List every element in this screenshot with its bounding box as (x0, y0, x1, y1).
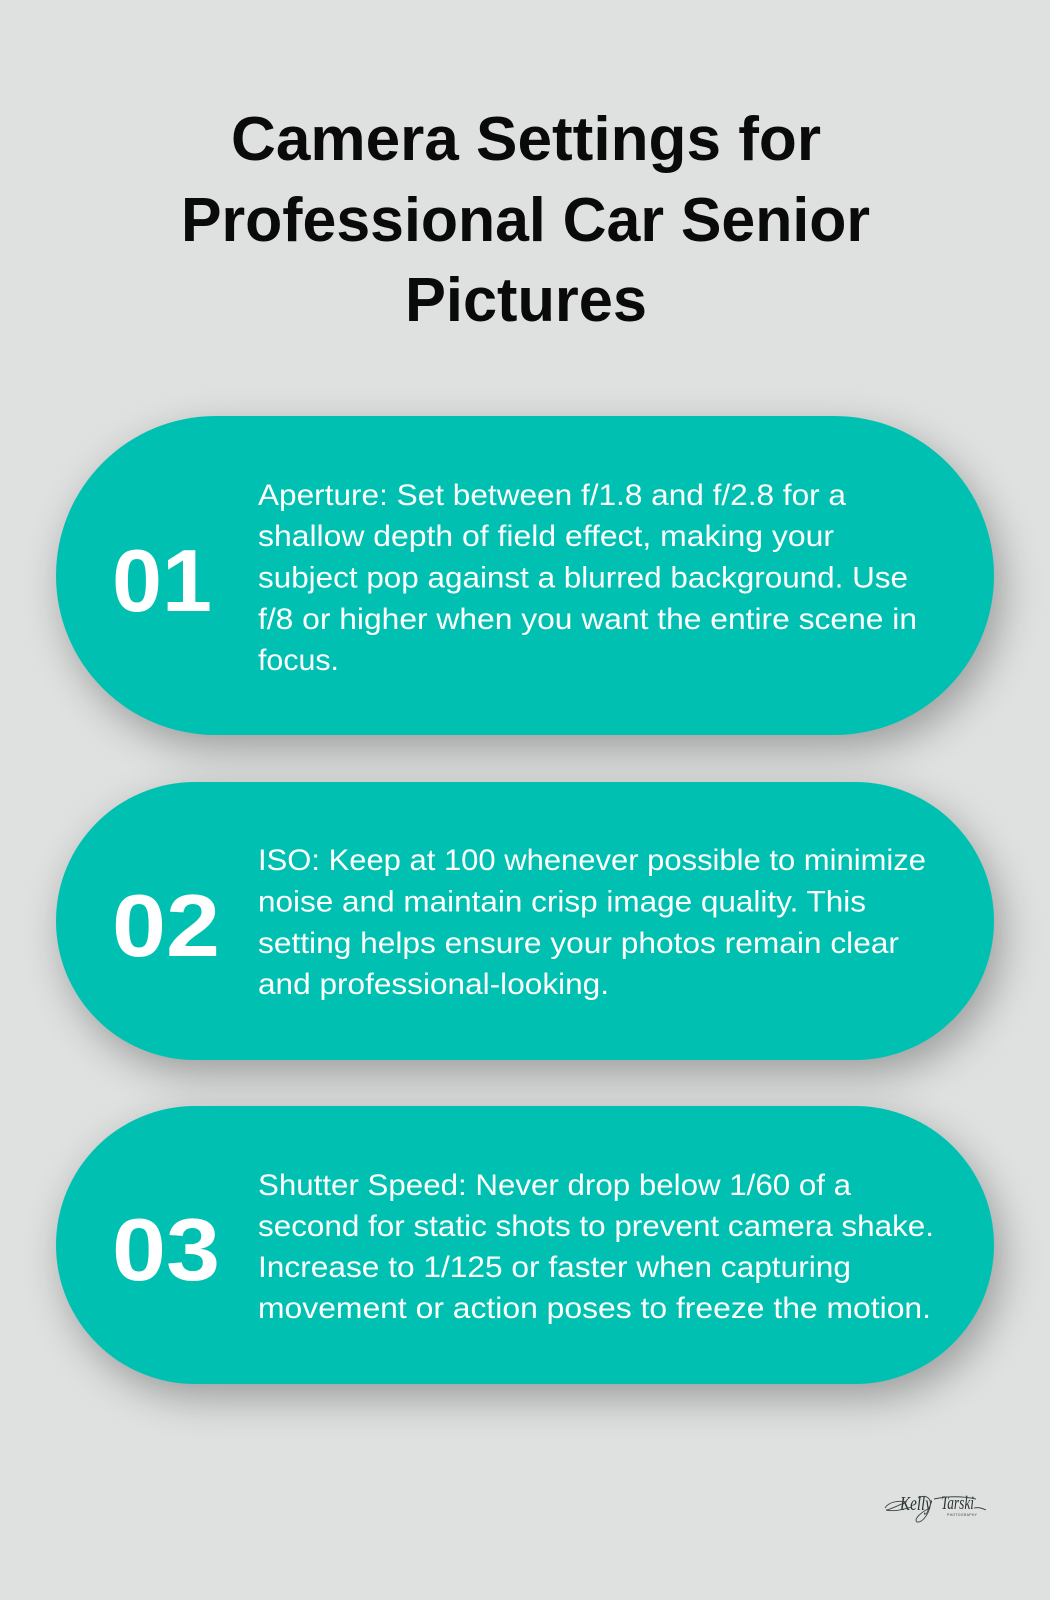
text block: aperture (258, 479, 917, 677)
panel: aperture pill background (56, 416, 994, 735)
text block: shutter speed: Shutter Speed: Never drop below 1/60 of a (258, 1169, 851, 1202)
signature logo: Tarski (941, 1493, 974, 1514)
title: Pictures (405, 266, 647, 335)
number 02: 02 (112, 876, 220, 975)
title: Professional Car Senior (181, 186, 870, 255)
text block: aperture: focus. (258, 644, 339, 677)
text block: ISO: ISO: Keep at 100 whenever possible to minimize (258, 844, 926, 877)
text block: aperture: f/8 or higher when you want the entire scene in (258, 603, 917, 636)
text block: shutter speed (258, 1169, 934, 1325)
text block: aperture: Aperture: Set between f/1.8 and f/2.8 for a (258, 479, 846, 512)
text block: aperture: shallow depth of field effect, making your (258, 520, 834, 553)
text block: shutter speed: movement or action poses to freeze the motion. (258, 1292, 931, 1325)
text block: ISO (258, 844, 926, 1001)
text block: ISO: noise and maintain crisp image quality. This (258, 886, 866, 918)
number 01: 01 (112, 531, 212, 630)
signature logo (885, 1493, 986, 1522)
signature logo: Kelly (899, 1493, 932, 1515)
text block: shutter speed: second for static shots to prevent camera shake. (258, 1210, 934, 1243)
panel: shutter speed pill background (56, 1106, 994, 1384)
text block: ISO: and professional-looking. (258, 968, 609, 1001)
number 03: 03 (112, 1200, 220, 1299)
text block: ISO: setting helps ensure your photos remain clear (258, 927, 899, 960)
signature logo: PHOTOGRAPHY (947, 1513, 978, 1517)
text block: aperture: subject pop against a blurred background. Use (258, 562, 908, 594)
text block: shutter speed: Increase to 1/125 or faster when capturing (258, 1251, 851, 1284)
title (181, 105, 870, 335)
title: Camera Settings for (231, 105, 821, 174)
panel: ISO pill background (56, 782, 994, 1060)
